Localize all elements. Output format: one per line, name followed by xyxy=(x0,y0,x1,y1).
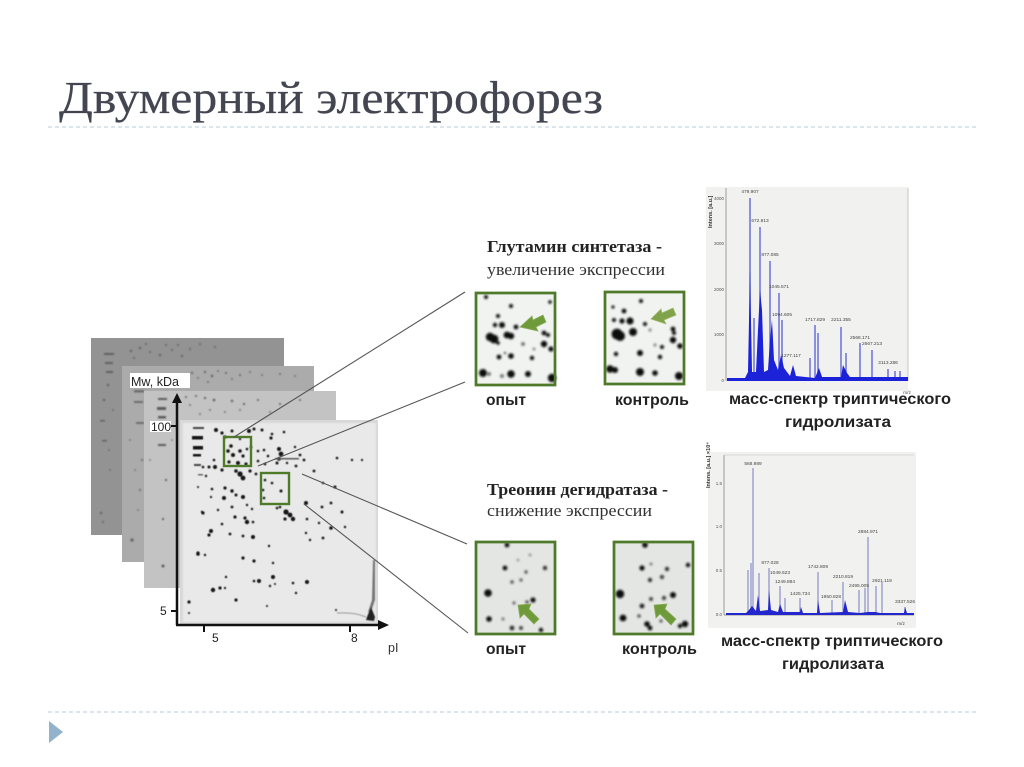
axis label: x 5: 5 xyxy=(212,631,219,645)
label: control 2: контроль xyxy=(622,641,697,658)
chart: mass spectrum 1: 3000 xyxy=(714,241,724,246)
chart: mass spectrum 1: 3113.286 xyxy=(878,360,898,366)
gel plate: front xyxy=(180,420,378,624)
chart: mass spectrum 1: 1277.117 xyxy=(781,353,801,359)
chart: mass spectrum 1: 479.907 xyxy=(741,189,759,195)
chart: mass spectrum 2: 1742.809 xyxy=(808,564,828,570)
icon: arrow glutamine control xyxy=(651,308,676,324)
chart: mass spectrum 1: 2000 xyxy=(714,287,724,292)
caption: spectrum 1 xyxy=(729,391,951,431)
chart: mass spectrum 1: 1045.571 xyxy=(769,284,789,290)
chart: mass spectrum 2 xyxy=(706,442,916,628)
connector lines xyxy=(234,292,468,633)
icon: arrow threonine experiment xyxy=(518,604,539,624)
chart: mass spectrum 1 xyxy=(706,187,911,396)
chart: mass spectrum 2: 1249.884 xyxy=(775,579,795,585)
chart: mass spectrum 1: 877.085 xyxy=(761,252,779,258)
caption: spectrum 1: масс-спектр триптического xyxy=(729,391,951,408)
label: control 1: контроль xyxy=(615,392,689,409)
icon: arrow glutamine experiment xyxy=(520,315,546,331)
chart: mass spectrum 2: 1.5 xyxy=(716,481,722,486)
chart: mass spectrum 1: 0 xyxy=(721,378,724,383)
heading: threonine dehydratase: снижение экспрессии xyxy=(487,501,652,520)
chart: mass spectrum 2: 1425.734 xyxy=(790,591,810,597)
chart: mass spectrum 2: 877.028 xyxy=(761,560,779,566)
chart: mass spectrum 2: 2921.119 xyxy=(872,578,892,584)
chart: mass spectrum 1: m/z xyxy=(903,390,911,396)
caption: spectrum 2 xyxy=(721,633,943,673)
chart: mass spectrum 2: 1950.828 xyxy=(821,594,841,600)
axis label: Mw, kDa: Mw, kDa xyxy=(131,375,179,389)
chart: mass spectrum 2: 568.989 xyxy=(744,461,762,467)
chart: mass spectrum 2: 2210.819 xyxy=(833,574,853,580)
axis label: 100: 100 xyxy=(151,420,171,434)
inset: glutamine experiment xyxy=(476,293,556,385)
axis label: y 5: 5 xyxy=(160,604,167,618)
chart: mass spectrum 2: 0.0 xyxy=(716,612,722,617)
caption: spectrum 2: гидролизата xyxy=(782,656,884,673)
chart: mass spectrum 2: 2884.971 xyxy=(858,529,878,535)
chart: mass spectrum 1: 4000 xyxy=(714,196,724,201)
inset: threonine control xyxy=(614,542,693,634)
gel plate: third xyxy=(144,391,336,588)
axis label: x 8: 8 xyxy=(351,631,358,645)
icon: arrow threonine control xyxy=(654,604,676,625)
gel plate: second xyxy=(122,366,314,562)
chart: mass spectrum 2: Intens. [a.u.] ×10⁴ xyxy=(706,442,712,488)
label: experiment 1: опыт xyxy=(486,392,526,409)
heading: glutamine synthetase: Глутамин синтетаза - xyxy=(487,237,662,256)
caption: spectrum 1: гидролизата xyxy=(785,414,891,431)
chart: mass spectrum 1: 672.813 xyxy=(751,218,769,224)
chart: mass spectrum 2: 1.0 xyxy=(716,524,722,529)
chart: mass spectrum 2: 1049.523 xyxy=(770,570,790,576)
title: Двумерный электрофорез xyxy=(59,73,603,123)
gel stack xyxy=(91,338,398,655)
heading: glutamine synthetase xyxy=(487,237,665,279)
axis label: pI: pI xyxy=(388,641,398,655)
icon: footer triangle xyxy=(49,721,63,743)
chart: mass spectrum 1: 1000 xyxy=(714,332,724,337)
chart: mass spectrum 2: 3337.526 xyxy=(895,599,915,605)
inset: threonine experiment xyxy=(476,542,555,634)
caption: spectrum 2: масс-спектр триптического xyxy=(721,633,943,650)
axes xyxy=(171,393,389,632)
chart: mass spectrum 1: 1094.605 xyxy=(772,312,792,318)
chart: mass spectrum 1: 2667.213 xyxy=(862,341,882,347)
heading: threonine dehydratase xyxy=(487,480,668,520)
gel plate: back xyxy=(91,338,284,535)
chart: mass spectrum 1: 2211.355 xyxy=(831,317,851,323)
green box: upper xyxy=(224,437,251,466)
heading: glutamine synthetase: увеличение экспрессии xyxy=(487,260,665,279)
green box: lower xyxy=(261,473,289,504)
axis label: Mw, kDa xyxy=(130,373,190,389)
chart: mass spectrum 1: 1717.829 xyxy=(805,317,825,323)
chart: mass spectrum 2: m/z xyxy=(897,621,905,627)
label: experiment 2: опыт xyxy=(486,641,526,658)
right-edge streak xyxy=(337,560,375,621)
chart: mass spectrum 2: 0.5 xyxy=(716,568,722,573)
chart: mass spectrum 1: 2568.171 xyxy=(850,335,870,341)
chart: mass spectrum 1: Intens. [a.u.] xyxy=(708,195,714,228)
chart: mass spectrum 2: 2495.005 xyxy=(849,583,869,589)
heading: threonine dehydratase: Треонин дегидратаза - xyxy=(487,480,668,499)
inset: glutamine control xyxy=(605,292,684,384)
